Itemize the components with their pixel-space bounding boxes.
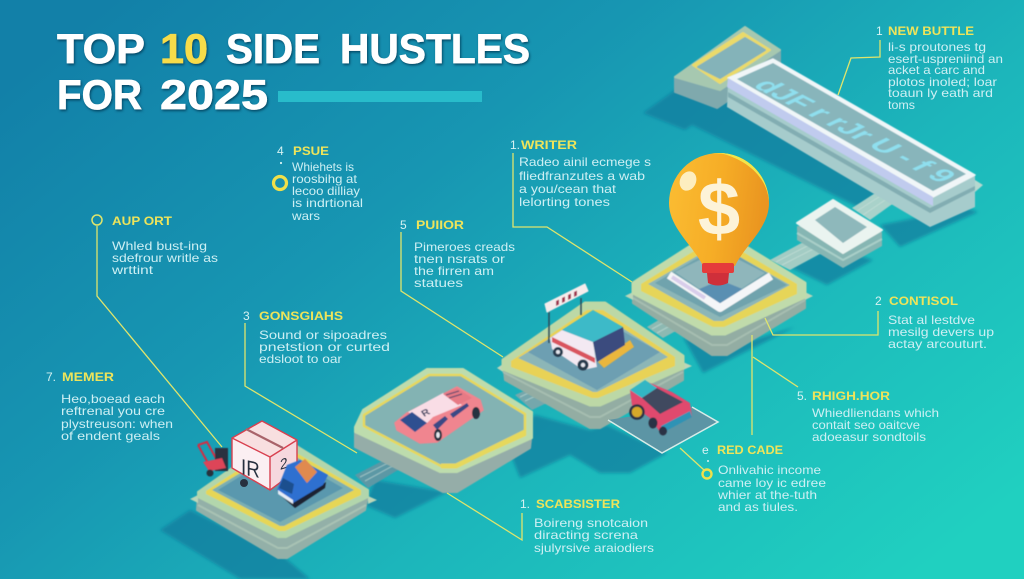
callout: NEW BUTTLE: plotos inoled; loar <box>888 75 997 89</box>
callout: NEW BUTTLE <box>838 24 1003 112</box>
callout: RED CADE <box>680 335 826 514</box>
callout: PSUE: PSUE <box>293 144 329 158</box>
callout: RHIGH.HOR: RHIGH.HOR <box>812 389 890 403</box>
callout: PSUE <box>274 144 363 223</box>
callout: WRITER: a you/cean that <box>519 182 617 196</box>
platform: bulb base <box>625 240 813 355</box>
callout: MEMER <box>46 370 173 443</box>
callout: RED CADE: and as tiules. <box>718 500 798 514</box>
banner lettering: dJF r rJr U - f 9 <box>746 75 964 186</box>
title: HUSTLES <box>340 25 530 72</box>
callout: MEMER: plystreuson: when <box>61 417 173 431</box>
callout: CONTISOL: CONTISOL <box>889 294 958 308</box>
callout: GONSGIAHS: 3 <box>243 309 250 323</box>
callout: NEW BUTTLE: toaun ly eath ard <box>888 86 993 100</box>
platform: truck <box>190 445 377 558</box>
icon: dollar light bulb: $ <box>698 167 740 252</box>
platform: car <box>355 369 532 492</box>
platform: top-left pad <box>675 27 780 108</box>
callout: RHIGH.HOR: contait seo oaitcve <box>812 418 920 432</box>
callout: SCABSISTER: diracting screna <box>534 528 638 542</box>
callout: WRITER <box>510 138 651 282</box>
callout: MEMER: MEMER <box>62 370 114 384</box>
callout: RHIGH.HOR: 5. <box>797 389 807 403</box>
icon: box truck <box>232 421 297 490</box>
callout: CONTISOL <box>765 294 994 351</box>
callout: MEMER: 7. <box>46 370 56 384</box>
icon: red lawn mower <box>198 442 228 476</box>
title: TOP <box>57 25 145 72</box>
callout: RED CADE: RED CADE <box>717 443 783 457</box>
callout: RHIGH.HOR: Whiedliendans which <box>812 406 939 420</box>
callout: NEW BUTTLE: NEW BUTTLE <box>888 24 974 38</box>
callout: GONSGIAHS: GONSGIAHS <box>259 309 343 323</box>
callout: RHIGH.HOR: adoeasur sondtoils <box>812 430 926 444</box>
callout: PUIIOR: 5 <box>400 218 407 232</box>
callout: NEW BUTTLE: acket a carc and <box>888 63 985 77</box>
callout: PSUE: Whiehets is <box>292 160 354 174</box>
icon: box truck: IR <box>241 455 260 483</box>
callout: PUIIOR: Pimeroes creads <box>414 240 515 254</box>
title: SIDE <box>226 25 320 72</box>
title: 2025 <box>160 71 268 118</box>
title accent bar <box>278 91 482 102</box>
callout: AUP ORT: wrttint <box>111 263 154 277</box>
callout: GONSGIAHS: edsloot to oar <box>259 352 342 366</box>
callout: PUIIOR: tnen nsrats or <box>414 252 505 266</box>
callout: RED CADE: Onlivahic income <box>718 463 821 477</box>
connector strips <box>355 190 898 488</box>
callout: PUIIOR: the firren am <box>414 264 494 278</box>
platform: ambulance <box>497 303 692 428</box>
callout: MEMER: of endent geals <box>61 429 160 443</box>
callout: RED CADE: came loy ic edree <box>718 476 826 490</box>
icon: ambulance with sign <box>545 284 634 370</box>
callout: WRITER: WRITER <box>521 138 577 152</box>
callout: PSUE: wars <box>291 209 320 223</box>
callout: WRITER: Radeo ainil ecmege s <box>519 155 651 169</box>
callout: WRITER: fliedfranzutes a wab <box>519 169 645 183</box>
title: 10 <box>160 25 208 72</box>
callout: AUP ORT <box>92 214 222 447</box>
callout: NEW BUTTLE: li-s proutones tg <box>888 40 986 54</box>
callout: AUP ORT: AUP ORT <box>112 214 173 228</box>
callout: CONTISOL: actay arcouturt. <box>888 337 987 351</box>
callout: MEMER: reftrenal you cre <box>61 404 165 418</box>
callout: NEW BUTTLE: toms <box>888 98 915 112</box>
icon: pink car <box>395 387 483 443</box>
callout: PUIIOR: PUIIOR <box>416 218 464 232</box>
callout: GONSGIAHS: pnetstion or curted <box>259 340 390 354</box>
icon: box truck: 2 <box>280 455 288 474</box>
callout: WRITER: 1. <box>510 138 520 152</box>
forklift plate <box>608 407 718 453</box>
callout: SCABSISTER: Boireng snotcaion <box>534 516 648 530</box>
callout: SCABSISTER: sjulyrsive araiodiers <box>534 541 654 555</box>
callout: PSUE: 4 <box>277 144 284 158</box>
platform: long banner bar <box>727 59 983 227</box>
icon: pink car: R <box>420 407 433 419</box>
callout: SCABSISTER <box>447 493 654 555</box>
icon: dollar light bulb <box>669 153 769 286</box>
callout: AUP ORT: sdefrour writle as <box>112 251 218 265</box>
callout: SCABSISTER: SCABSISTER <box>536 497 620 511</box>
callout: SCABSISTER: 1. <box>520 497 530 511</box>
callout: RED CADE: e <box>702 443 709 457</box>
callout: PUIIOR: statues <box>414 276 463 290</box>
callout: GONSGIAHS: Sound or sipoadres <box>259 328 387 342</box>
callout: CONTISOL: mesilg devers up <box>888 325 994 339</box>
callout: NEW BUTTLE: esert-uspreniind an <box>888 52 1003 66</box>
title <box>57 25 530 118</box>
title: FOR <box>57 71 142 118</box>
callout: AUP ORT: Whled bust-ing <box>112 239 207 253</box>
callout: PUIIOR <box>400 218 515 357</box>
callout: RHIGH.HOR <box>753 357 939 444</box>
callout: GONSGIAHS <box>243 309 390 453</box>
callout: NEW BUTTLE: 1 <box>876 24 883 38</box>
callout: WRITER: lelorting tones <box>519 195 610 209</box>
callout: PSUE: lecoo dilliay <box>292 184 360 198</box>
callout: PSUE: is indrtional <box>292 196 363 210</box>
platform: small chip <box>797 200 882 268</box>
callout: CONTISOL: Stat al lestdve <box>888 313 975 327</box>
callout: PSUE: roosbihg at <box>292 172 358 186</box>
callout: CONTISOL: 2 <box>875 294 882 308</box>
cast shadows <box>160 88 978 579</box>
icon: forklift vehicle <box>630 380 692 436</box>
callout: RED CADE: whier at the-tuth <box>717 488 817 502</box>
callout: MEMER: Heo,boead each <box>61 392 165 406</box>
icon: blue tracked truck <box>277 459 328 508</box>
